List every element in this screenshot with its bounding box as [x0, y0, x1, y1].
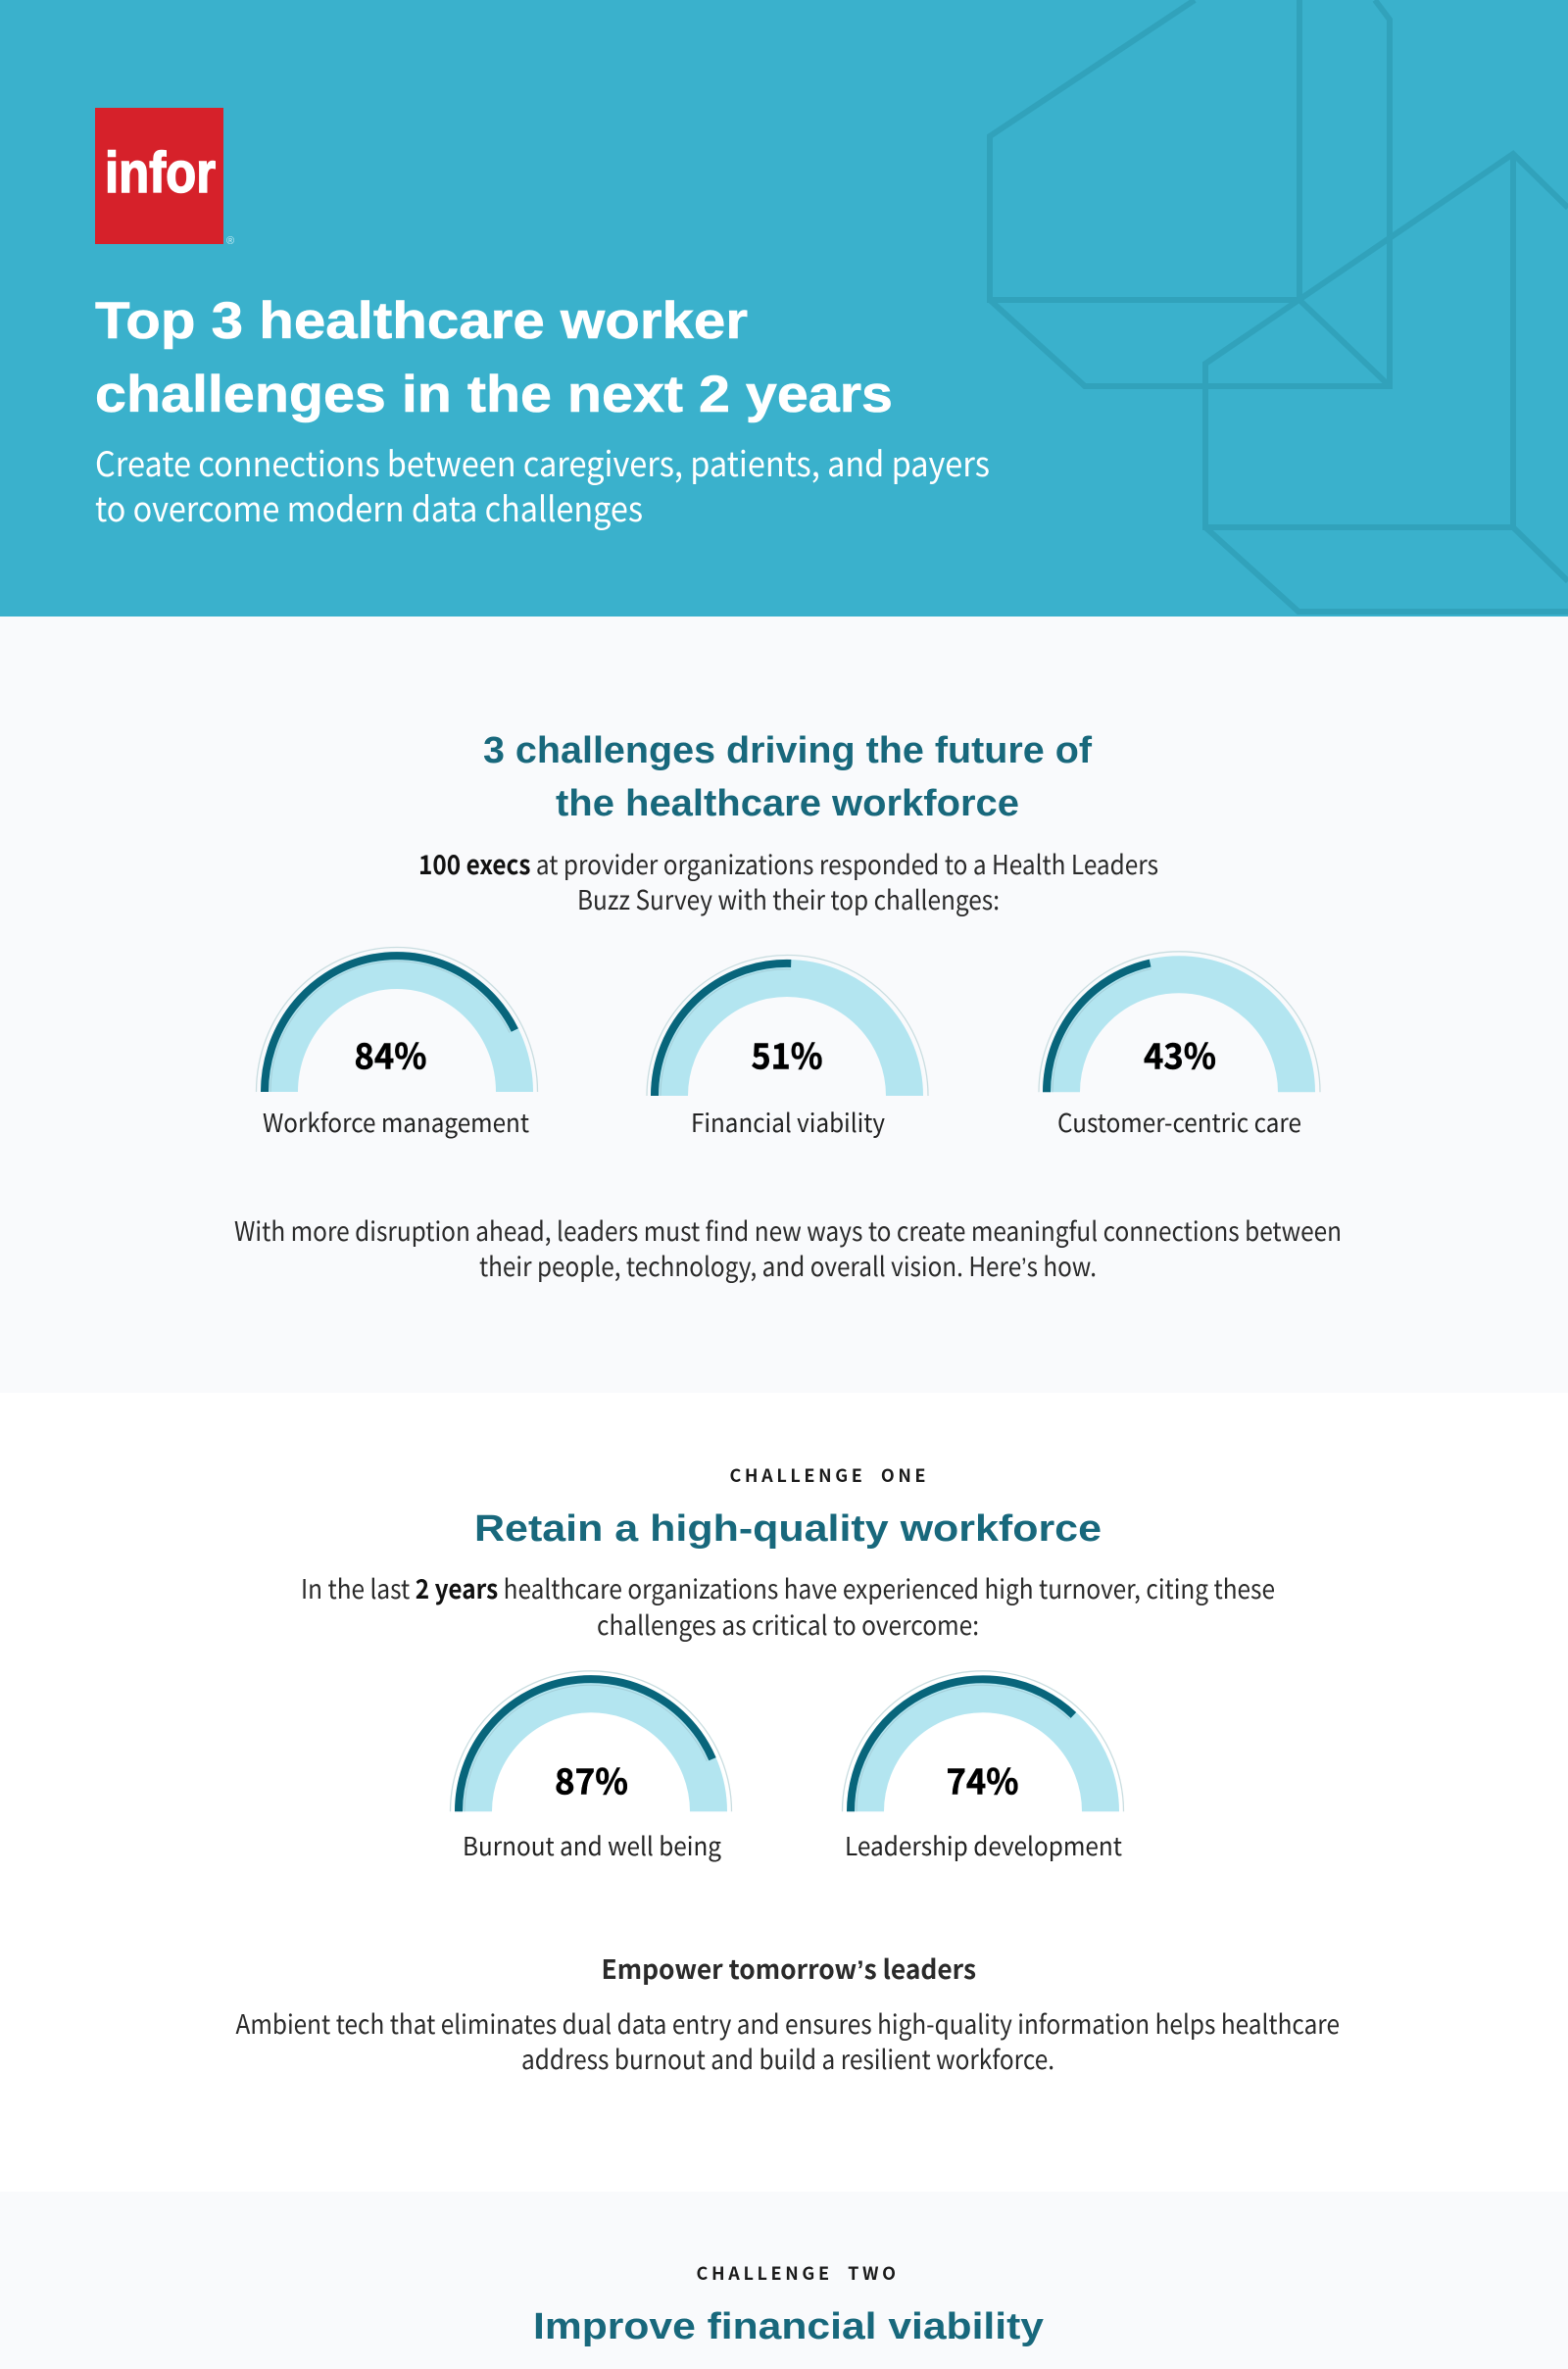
gauge: workforce management 84%	[257, 947, 537, 1140]
gauge: customer-centric care 43%: Customer-centric care	[1057, 1104, 1301, 1140]
challenge one body text: Ambient tech that eliminates dual data entry and ensures high-quality information helps healthcare	[235, 2003, 1340, 2042]
title	[95, 292, 893, 423]
logo: infor	[95, 108, 234, 247]
panel: challenge two	[0, 2192, 1568, 2369]
logo: infor: infor	[105, 141, 216, 205]
survey intro text	[418, 844, 1158, 917]
challenge one intro text	[301, 1568, 1275, 1643]
survey intro text: 100 execs at provider organizations responded to a Health Leaders	[418, 844, 1158, 882]
closing text: With more disruption ahead, leaders must find new ways to create meaningful connections between	[234, 1210, 1342, 1249]
subheading: empower leaders: Empower tomorrow’s leaders	[602, 1949, 976, 1987]
gauge: burnout and well being 87%: Burnout and well being	[463, 1827, 721, 1863]
eyebrow: challenge one: CHALLENGE ONE	[729, 1462, 925, 1488]
logo: infor: ®	[226, 235, 234, 247]
title: challenges in the next 2 years	[95, 366, 893, 423]
subtitle: to overcome modern data challenges	[95, 482, 643, 532]
heading: improve financial viability: Improve financial viability	[533, 2306, 1044, 2347]
gauge: workforce management 84%: 84%	[355, 1029, 427, 1080]
gauge: leadership development 74%: Leadership development	[845, 1827, 1122, 1863]
challenge one body text	[235, 2003, 1340, 2077]
gauge: customer-centric care 43%: 43%	[1144, 1029, 1216, 1080]
gauge: leadership development 74%	[843, 1671, 1123, 1863]
panel: challenge one	[0, 1394, 1568, 2192]
heading: 3 challenges	[483, 730, 1092, 824]
heading: 3 challenges: 3 challenges driving the future of	[483, 730, 1092, 771]
challenge one intro text: challenges as critical to overcome:	[597, 1604, 979, 1643]
panel: survey overview	[0, 617, 1568, 1393]
gauge: financial viability 51%	[647, 955, 928, 1140]
closing text: their people, technology, and overall vision. Here’s how.	[479, 1246, 1097, 1284]
eyebrow: challenge two: CHALLENGE TWO	[696, 2260, 896, 2286]
gauge: burnout and well being 87%	[451, 1671, 731, 1863]
gauge: workforce management 84%: Workforce management	[263, 1104, 529, 1140]
gauge: financial viability 51%: Financial viability	[691, 1104, 885, 1140]
challenge one body text: address burnout and build a resilient workforce.	[521, 2039, 1054, 2077]
subtitle: Create connections between caregivers, patients, and payers	[95, 437, 990, 487]
decorative hexagon outlines	[990, 0, 1568, 612]
survey intro text: Buzz Survey with their top challenges:	[577, 879, 1000, 917]
heading: retain workforce: Retain a high-quality workforce	[474, 1508, 1102, 1550]
subtitle	[95, 437, 990, 532]
gauge: financial viability 51%: 51%	[751, 1029, 823, 1080]
gauge: leadership development 74%: 74%	[947, 1754, 1019, 1805]
heading: 3 challenges: the healthcare workforce	[556, 783, 1019, 824]
challenge one intro text: In the last 2 years healthcare organizations have experienced high turnover, citing these	[301, 1568, 1275, 1606]
gauge: burnout and well being 87%: 87%	[555, 1754, 628, 1805]
gauge: customer-centric care 43%	[1039, 952, 1320, 1140]
closing text	[234, 1210, 1342, 1284]
panel: header banner	[0, 0, 1568, 617]
title: Top 3 healthcare worker	[95, 292, 748, 350]
